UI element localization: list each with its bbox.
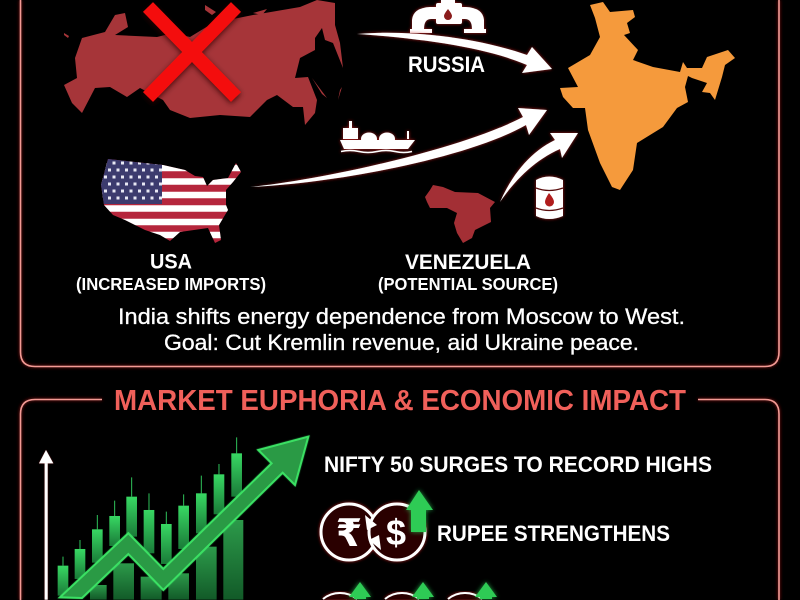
text block: energy shift summary: Goal: Cut Kremlin revenue, aid Ukraine peace. xyxy=(164,330,639,355)
text block: energy shift summary: India shifts energy dependence from Moscow to West. xyxy=(118,304,685,329)
axis arrow xyxy=(39,450,53,600)
arrow: Venezuela to India xyxy=(500,133,578,202)
text: Nifty 50: NIFTY 50 SURGES TO RECORD HIGHS xyxy=(324,452,712,477)
Russia shape xyxy=(64,0,343,125)
label: Venezuela: VENEZUELA xyxy=(405,251,531,274)
label: Russia: RUSSIA xyxy=(408,52,485,77)
heading: market euphoria: MARKET EUPHORIA & ECONOMIC IMPACT xyxy=(114,385,686,417)
icon: rupee dollar exchange: ₹ xyxy=(336,513,362,555)
label: USA: USA xyxy=(150,250,192,274)
icon: green up arrow xyxy=(406,490,433,532)
label: Venezuela: (POTENTIAL SOURCE) xyxy=(378,274,558,294)
label: USA xyxy=(76,250,266,294)
map: USA flag xyxy=(101,159,241,243)
icon: tanker ship xyxy=(340,121,415,152)
text block: energy shift summary xyxy=(118,304,685,355)
arrow: Russia to India xyxy=(357,33,552,73)
icon: oil barrel xyxy=(536,176,563,219)
panel: market frame xyxy=(20,400,779,600)
icon: oil pipe valve xyxy=(410,0,486,33)
chart: rising candlesticks with arrow xyxy=(39,437,308,600)
label: USA: (INCREASED IMPORTS) xyxy=(76,274,266,294)
map: Russia with red cross xyxy=(64,0,343,125)
label: Venezuela xyxy=(378,251,558,294)
icons: partial circles with up arrows xyxy=(323,582,497,599)
map: Venezuela xyxy=(425,185,495,243)
icon: rupee dollar exchange: $ xyxy=(386,512,406,553)
lower bars xyxy=(90,520,243,600)
panel: energy shift frame xyxy=(20,0,779,366)
icon: rupee dollar exchange xyxy=(321,504,425,560)
red X xyxy=(148,7,236,97)
candlesticks xyxy=(58,437,242,596)
text: rupee strengthens: RUPEE STRENGTHENS xyxy=(437,521,670,546)
growth arrow xyxy=(60,437,308,598)
arrow: USA to India xyxy=(250,108,547,187)
map: India xyxy=(560,2,735,190)
